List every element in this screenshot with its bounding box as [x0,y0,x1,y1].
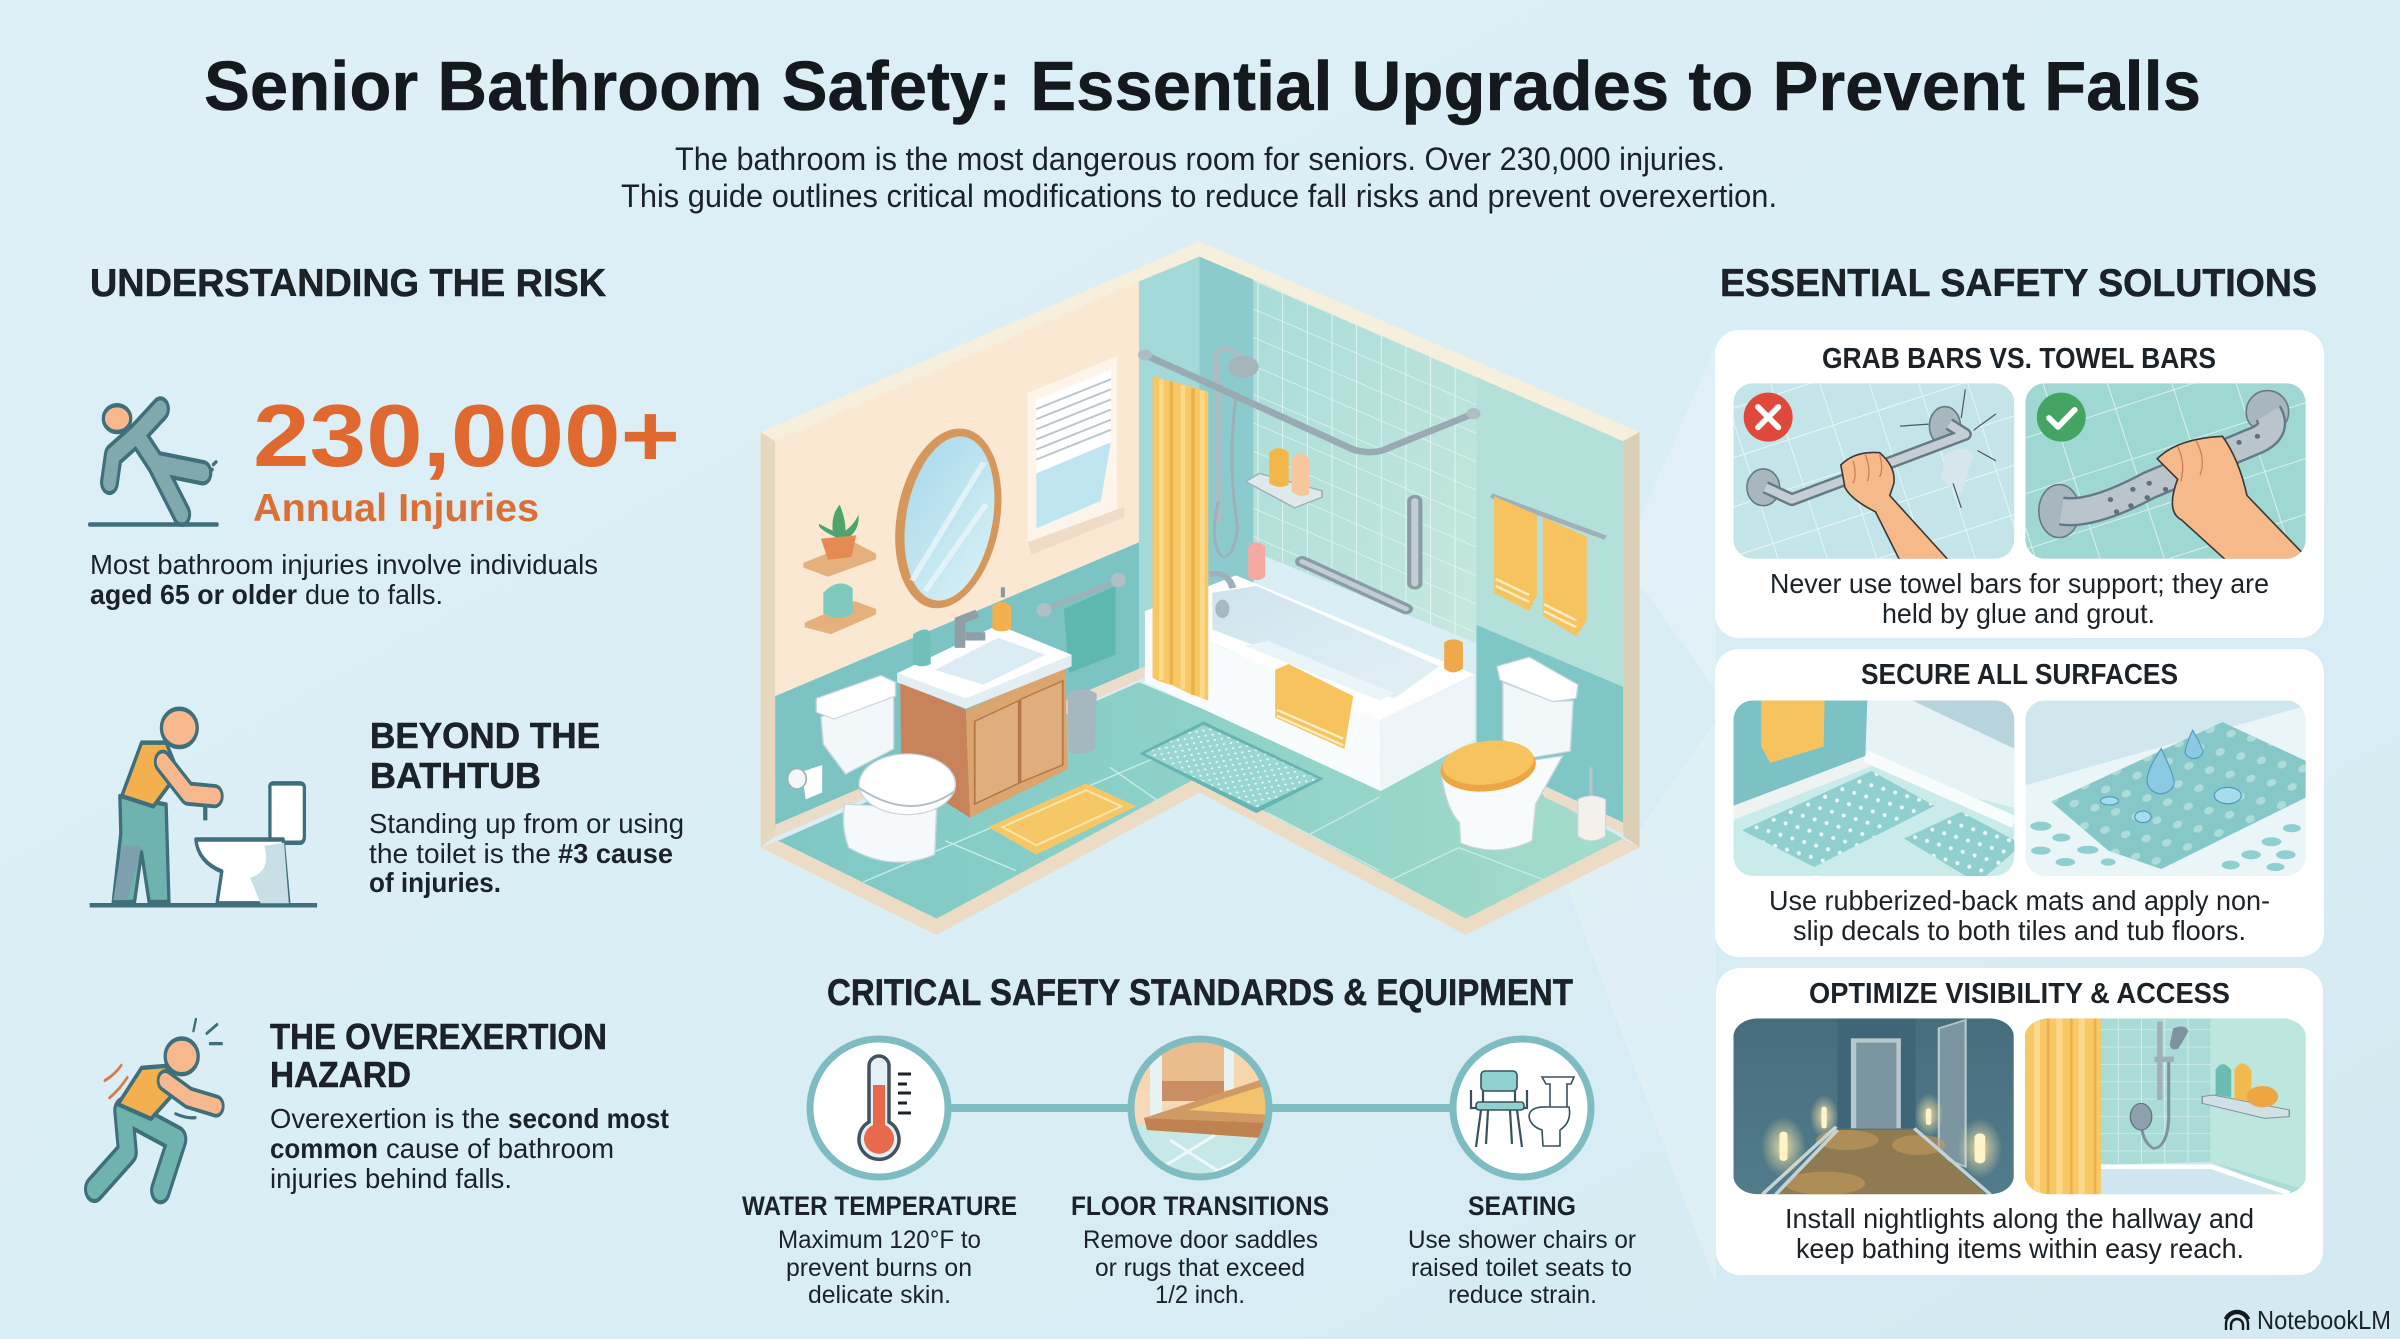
subtitle [621,141,1777,214]
toilet paper [788,765,822,799]
light rays from room to solutions [1567,345,1716,1285]
bath mat [1139,721,1324,813]
panel: optimize visibility and access: keep bathing items within easy reach. [1796,1233,2244,1264]
panel: secure all surfaces [1715,649,2324,957]
icon: floor transition [1130,1030,1280,1185]
shelf with plant [803,505,876,577]
item: water temperature [742,1039,1017,1309]
panel: understanding the risk [90,262,684,1194]
wall towels [1491,495,1606,636]
bathtub [1145,573,1475,791]
block: beyond the bathtub: of injuries. [369,867,501,898]
heading: essential safety solutions: ESSENTIAL SAFETY SOLUTIONS [1720,262,2317,305]
image: floor mats [1733,700,2022,883]
connector line [950,1104,1460,1112]
icon: person using toilet [90,709,317,905]
item: water temperature: delicate skin. [808,1281,951,1309]
item: floor transitions: or rugs that exceed [1095,1254,1305,1282]
subtitle: This guide outlines critical modifications to reduce fall risks and prevent overexertion. [621,178,1777,214]
mirror [883,424,1014,613]
block: beyond the bathtub: BEYOND THE [370,715,600,756]
stat description: Most bathroom injuries involve individuals [90,549,598,580]
shelf with cup [805,583,876,634]
block: the overexertion hazard: second most [508,1103,669,1134]
block: the overexertion hazard: Overexertion is the [270,1103,500,1134]
corner shelf with bottles [1246,448,1322,508]
item: water temperature: Maximum 120°F to [778,1226,981,1254]
item: seating: reduce strain. [1448,1281,1597,1309]
block: the overexertion hazard: THE OVEREXERTION [270,1016,607,1057]
image: non-slip decals with water drops [2025,700,2306,876]
block: the overexertion hazard: common [270,1133,378,1164]
image: proper grab bar [2025,383,2306,561]
block: beyond the bathtub: Standing up from or using [369,808,684,839]
item: water temperature: WATER TEMPERATURE [742,1191,1017,1221]
stat description: aged 65 or older [90,579,297,610]
illustration: isometric bathroom [761,241,1640,935]
panel: grab bars vs towel bars: GRAB BARS VS. TOWEL BARS [1822,343,2216,375]
item: seating: SEATING [1468,1191,1576,1221]
heading: critical safety standards and equipment: CRITICAL SAFETY STANDARDS & EQUIPMENT [827,972,1573,1013]
block: the overexertion hazard: HAZARD [270,1054,411,1095]
logo: NotebookLM: NotebookLM [2257,1305,2391,1335]
block: beyond the bathtub [369,715,684,898]
shower head and hose [1214,348,1259,557]
panel: secure all surfaces: SECURE ALL SURFACES [1861,659,2178,691]
window [1028,356,1124,555]
yellow rug [988,783,1136,855]
block: the overexertion hazard [270,1016,669,1194]
item: floor transitions: Remove door saddles [1083,1226,1318,1254]
block: beyond the bathtub: #3 cause [558,838,673,869]
image: shower within reach [2025,1018,2306,1194]
subtitle: The bathroom is the most dangerous room for seniors. Over 230,000 injuries. [675,141,1725,177]
panel: secure all surfaces: slip decals to both tiles and tub floors. [1793,915,2246,946]
toilet left [816,675,955,862]
item: water temperature: prevent burns on [786,1254,972,1282]
panel: grab bars vs towel bars: Never use towel bars for support; they are [1770,568,2269,599]
soap on tub [1444,639,1463,672]
toilet brush [1578,767,1606,841]
pink bottle [1248,542,1265,580]
panel: secure all surfaces: Use rubberized-back mats and apply non- [1769,885,2270,916]
item: floor transitions [1071,1030,1329,1309]
vanity [897,587,1072,818]
panel: optimize visibility and access: OPTIMIZE VISIBILITY & ACCESS [1809,978,2230,1010]
image: towel bar failing [1733,383,2014,561]
image: hallway nightlights [1733,1018,2014,1195]
block: the overexertion hazard: cause of bathroom [386,1133,614,1164]
heading: understanding the risk: UNDERSTANDING THE RISK [90,262,606,305]
stat label: Annual Injuries [253,487,539,530]
panel: optimize visibility and access [1716,968,2323,1275]
shower curtain [1153,376,1208,701]
stat description: due to falls. [305,579,443,610]
block: beyond the bathtub: the toilet is the [369,838,551,869]
towel bar with teal towel [1036,573,1126,673]
panel: optimize visibility and access: Install nightlights along the hallway and [1785,1203,2254,1234]
panel: grab bars vs towel bars [1715,330,2324,638]
item: seating: Use shower chairs or [1408,1226,1636,1254]
grab bars [1302,501,1415,609]
block: beyond the bathtub: BATHTUB [370,755,541,796]
item: seating [1408,1039,1636,1309]
icon: thermometer [810,1039,948,1177]
item: floor transitions: 1/2 inch. [1155,1281,1245,1309]
title: Senior Bathroom Safety: Essential Upgrades to Prevent Falls [204,47,2201,125]
toilet right [1435,657,1578,850]
icon: person overexerting [94,1019,222,1190]
curtain rod [1138,349,1481,452]
block: the overexertion hazard: injuries behind falls. [270,1163,512,1194]
panel: grab bars vs towel bars: held by glue and grout. [1882,598,2155,629]
item: seating: raised toilet seats to [1411,1254,1632,1282]
stat description [90,549,598,610]
stat: 230,000+: 230,000+ [253,386,680,485]
item: floor transitions: FLOOR TRANSITIONS [1071,1191,1329,1221]
trash bin [1067,689,1097,754]
icon: falling person [90,405,217,524]
icon: shower chair and toilet [1453,1039,1591,1177]
towel on tub [1275,664,1353,749]
